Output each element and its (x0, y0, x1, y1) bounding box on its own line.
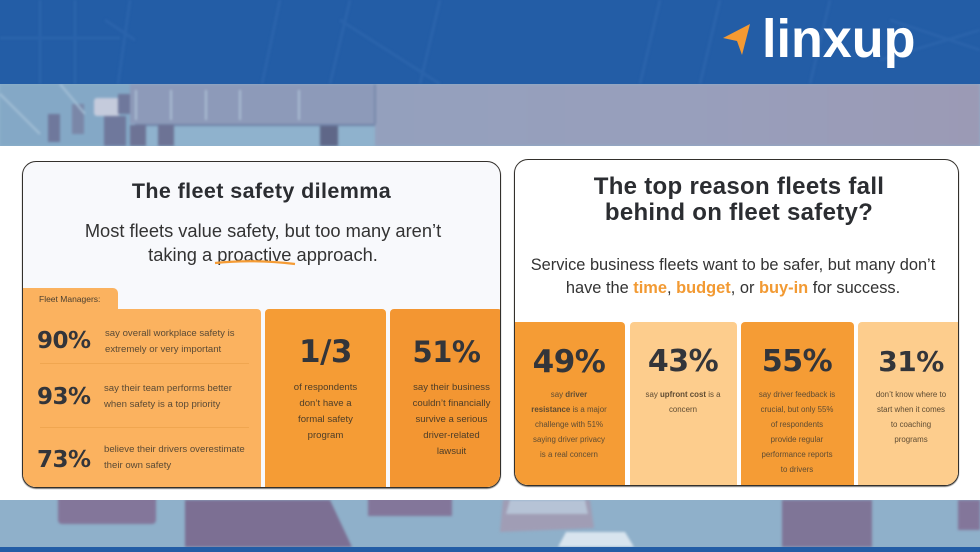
logo: linxup (723, 9, 915, 69)
text 31% (876, 390, 946, 444)
heading: top reason fleets fall behind: The top reason fleets fall (594, 173, 884, 200)
text 43%: concern (669, 405, 697, 414)
orange panel behind fleet manager stats (23, 309, 261, 489)
text 49% (531, 390, 607, 459)
text 43%: say upfront cost is a (646, 390, 720, 399)
stat: 43% (646, 344, 720, 414)
heading: top reason fleets fall behind (594, 173, 884, 226)
text 51%: driver-related (423, 430, 480, 441)
text: most fleets value safety: Most fleets value safety, but too many aren’t (85, 220, 441, 241)
number 73%: 73% (37, 447, 91, 473)
text 55%: performance reports (761, 450, 833, 459)
column 43% background (630, 322, 737, 487)
stat: 93% (37, 383, 232, 410)
icon: orange navigation arrow (723, 24, 750, 55)
text 51%: lawsuit (437, 446, 466, 457)
tab: fleet managers: Fleet Managers: (39, 294, 100, 304)
number 93%: 93% (37, 384, 91, 410)
stat: 51% (413, 335, 490, 457)
stat: 49% (531, 344, 607, 459)
divider (40, 363, 249, 364)
panel: the fleet safety dilemma (22, 161, 501, 488)
text 49%: say driver (551, 390, 587, 399)
text 55%: crucial, but only 55% (761, 405, 833, 414)
text 73%: their own safety (104, 460, 171, 471)
text 51% (413, 382, 490, 457)
text 31%: programs (894, 435, 928, 444)
bottom blue strip (0, 547, 980, 552)
text 90%: say overall workplace safety is (105, 328, 235, 339)
underline accent for proactive (214, 260, 296, 266)
stat: 55% (759, 344, 835, 474)
text 1/3: of respondents (294, 382, 357, 393)
text: service business fleets (531, 256, 936, 297)
tab: fleet managers (23, 288, 118, 312)
text 49%: resistance is a major (531, 405, 607, 414)
text 93%: when safety is a top priority (104, 399, 220, 410)
text 31%: start when it comes (877, 405, 945, 414)
stat: 73% (37, 444, 245, 473)
stat: 90% (37, 328, 235, 355)
number 43%: 43% (648, 344, 718, 379)
divider (40, 427, 249, 428)
text 1/3 (294, 382, 357, 441)
text 55%: of respondents (771, 420, 823, 429)
number 1/3: 1/3 (299, 334, 352, 370)
top photo band: highway signs (0, 84, 980, 146)
text: service business fleets: Service business fleets want to be safer, but many don’t (531, 256, 935, 274)
number 55%: 55% (762, 344, 832, 379)
text 93% (104, 383, 232, 410)
logo wordmark: linxup (762, 9, 915, 69)
text 49%: challenge with 51% (535, 420, 603, 429)
top blue header band (0, 0, 980, 84)
text: most fleets value safety: taking a proactive approach. (148, 244, 378, 265)
text 31%: to coaching (891, 420, 931, 429)
text: most fleets value safety (85, 220, 442, 265)
text 43% (646, 390, 720, 414)
heading: top reason fleets fall behind: behind on fleet safety? (605, 199, 873, 226)
text 55%: to drivers (781, 465, 813, 474)
orange column 51% background (390, 309, 502, 489)
text 49%: saying driver privacy (533, 435, 605, 444)
text 90%: extremely or very important (105, 344, 221, 355)
text 1/3: formal safety (298, 414, 353, 425)
text 1/3: don’t have a (299, 398, 352, 409)
panel: top reason fleets fall behind (514, 159, 959, 486)
text 1/3: program (308, 430, 343, 441)
number 31%: 31% (878, 345, 944, 378)
text 73% (104, 444, 245, 471)
column 55% background (741, 322, 854, 487)
number 51%: 51% (413, 335, 480, 369)
text 55% (759, 390, 835, 474)
number 49%: 49% (533, 344, 605, 380)
text 51%: say their business (413, 382, 490, 393)
text 73%: believe their drivers overestimate (104, 444, 245, 455)
orange column 1/3 background (265, 309, 386, 489)
text 31%: don’t know where to (876, 390, 946, 399)
text 90% (105, 328, 235, 355)
text 51%: couldn’t financially (413, 398, 490, 409)
text 93%: say their team performs better (104, 383, 232, 394)
text 55%: provide regular (771, 435, 823, 444)
text 55%: say driver feedback is (759, 390, 835, 399)
text 49%: is a real concern (540, 450, 598, 459)
text 51%: survive a serious (416, 414, 487, 425)
column 31% background (858, 322, 960, 487)
heading: the fleet safety dilemma: The fleet safety dilemma (132, 179, 391, 203)
stat: 1/3 (294, 334, 357, 441)
bottom photo band: cars on road (0, 500, 980, 547)
column 49% background (515, 322, 625, 487)
stat: 31% (876, 345, 946, 444)
number 90%: 90% (37, 328, 91, 354)
text: service business fleets: have the time, budget, or buy-in for success. (566, 279, 900, 297)
